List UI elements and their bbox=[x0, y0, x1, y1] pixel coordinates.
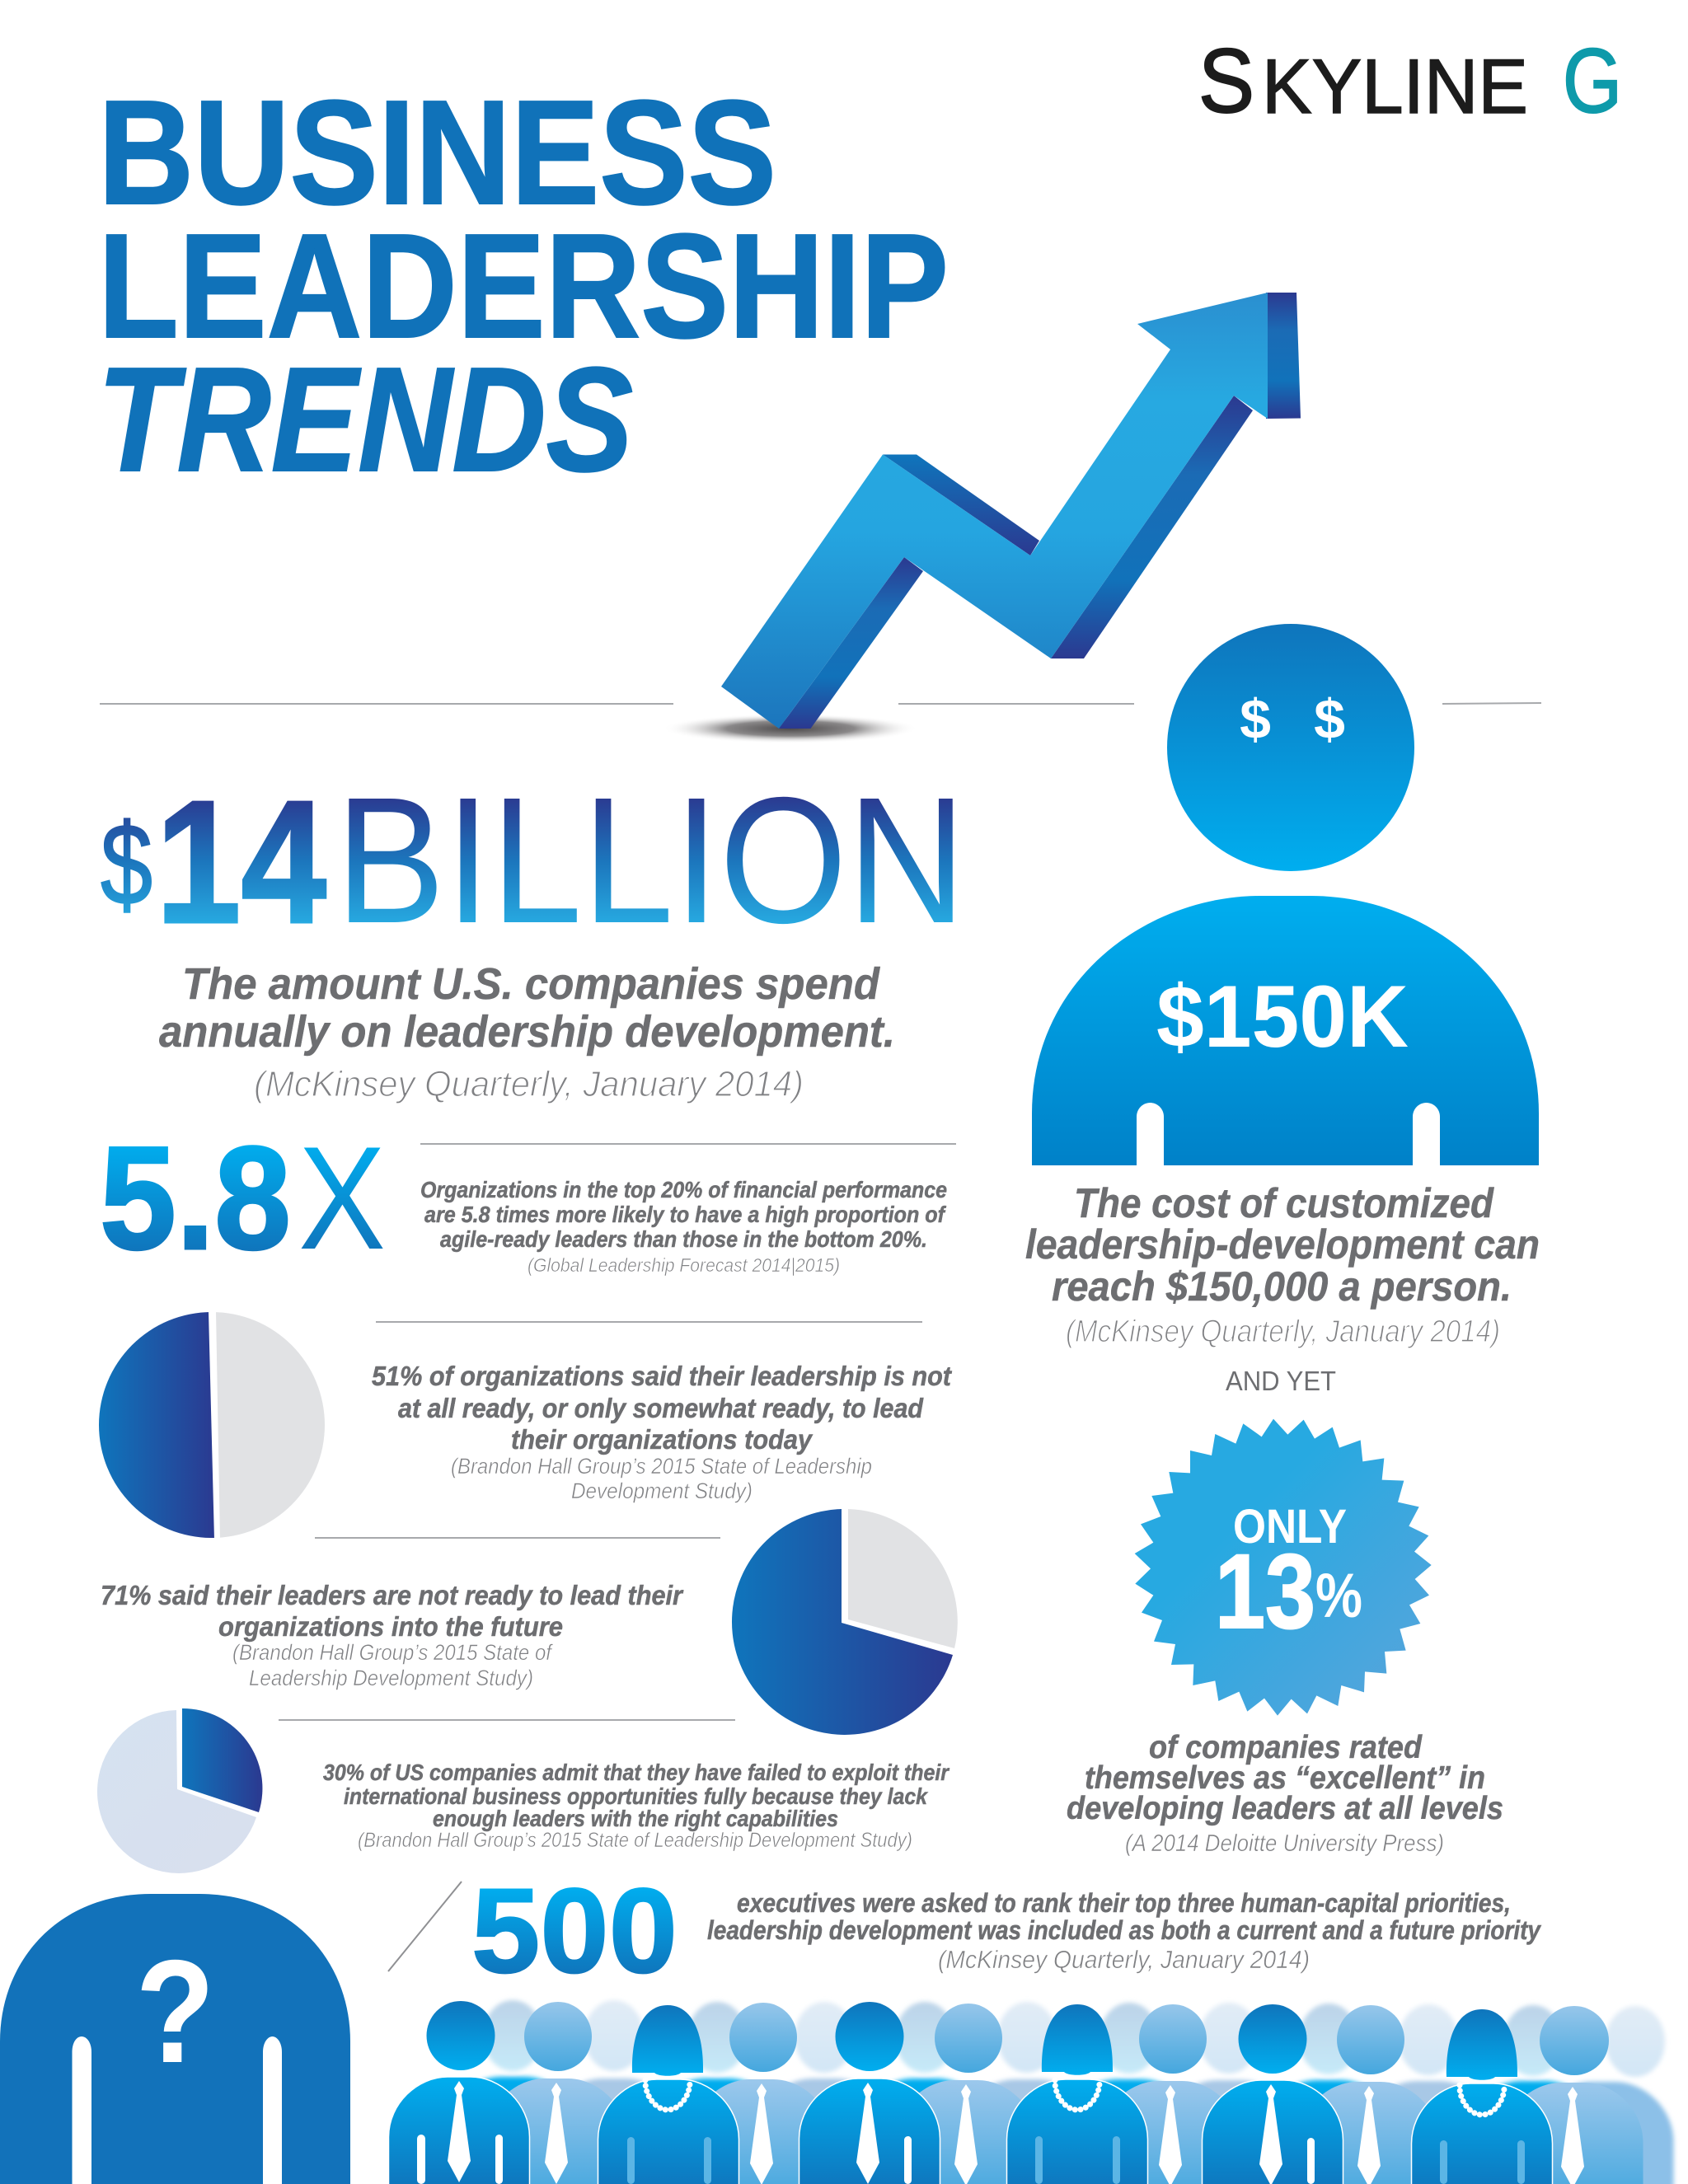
text: 30% description bbox=[323, 1760, 950, 1852]
text: $150K description bbox=[1025, 1180, 1540, 1349]
logo: Skyline G: S bbox=[1198, 30, 1254, 132]
text: 71% description bbox=[101, 1580, 684, 1690]
text: $150K description: reach $150,000 a person. bbox=[1052, 1263, 1512, 1310]
middle row of light figures bbox=[486, 2002, 1643, 2184]
text: 500 description: leadership development was included as both a current and a future priority bbox=[707, 1915, 1542, 1945]
text: 500 description: executives were asked to rank their top three human-capital priorities, bbox=[737, 1888, 1511, 1918]
text: 71% description: (Brandon Hall Group’s 2015 State of bbox=[232, 1640, 553, 1665]
text: 51% description bbox=[372, 1361, 953, 1503]
icon: person with dollar eyes bbox=[1032, 624, 1539, 1165]
back row of blurred figures bbox=[442, 2000, 1673, 2184]
text: $150K description: (McKinsey Quarterly, January 2014) bbox=[1066, 1315, 1500, 1349]
front row of figures bbox=[389, 2001, 1553, 2184]
title: BUSINESS bbox=[98, 70, 776, 236]
text: 51% description: their organizations today bbox=[511, 1424, 814, 1455]
text: 13% description bbox=[1067, 1730, 1503, 1857]
icon: starburst badge only 13%: 13 bbox=[1215, 1533, 1315, 1651]
text: $14 billion description bbox=[159, 959, 895, 1104]
text: 5.8X description: are 5.8 times more likely to have a high proportion of bbox=[424, 1202, 946, 1227]
text: 51% description: Development Study) bbox=[571, 1479, 753, 1503]
stat: $14 billion: BILLION bbox=[335, 761, 966, 961]
stat: $14 billion: $ bbox=[101, 799, 152, 929]
divider above 71% text bbox=[315, 1537, 720, 1539]
logo: Skyline G: KYLINE bbox=[1262, 43, 1528, 129]
divider above 30% text bbox=[279, 1719, 735, 1721]
text: $150K description: The cost of customized bbox=[1074, 1180, 1494, 1226]
text: $14 billion description: annually on leadership development. bbox=[159, 1007, 895, 1057]
text: 13% description: of companies rated bbox=[1149, 1730, 1423, 1765]
text: 5.8X description: (Global Leadership Forecast 2014|2015) bbox=[528, 1254, 840, 1276]
text: 13% description: developing leaders at all levels bbox=[1067, 1791, 1503, 1826]
icon: question-mark person bbox=[0, 1894, 350, 2184]
icon: person with dollar eyes: $150K bbox=[1156, 967, 1409, 1066]
text: 71% description: Leadership Development Study) bbox=[249, 1666, 533, 1690]
text: 5.8X description bbox=[420, 1177, 947, 1276]
text: 5.8X description: Organizations in the top 20% of financial performance bbox=[420, 1177, 947, 1202]
icon: person with dollar eyes: $ bbox=[1314, 688, 1345, 751]
text: 51% description: (Brandon Hall Group’s 2015 State of Leadership bbox=[451, 1454, 872, 1479]
text: $150K description: leadership-development can bbox=[1025, 1221, 1540, 1268]
icon: question-mark person: ? bbox=[135, 1929, 214, 2093]
title: TRENDS bbox=[97, 337, 633, 503]
chart: 71% pie bbox=[732, 1509, 958, 1735]
text: 51% description: at all ready, or only somewhat ready, to lead bbox=[398, 1393, 924, 1423]
illustration: crowd of executives bbox=[389, 2000, 1673, 2184]
stat: 5.8X: X bbox=[298, 1116, 386, 1280]
text: and yet: AND YET bbox=[1226, 1366, 1336, 1396]
icon: starburst badge only 13%: ONLY bbox=[1233, 1500, 1347, 1554]
icon: person with dollar eyes: $ bbox=[1240, 688, 1271, 751]
stat: $14 billion: 14 bbox=[156, 764, 326, 959]
icon: rising arrow bbox=[663, 293, 1301, 743]
stat: 500: 500 bbox=[471, 1863, 678, 1998]
text: 500 description: (McKinsey Quarterly, January 2014) bbox=[938, 1945, 1310, 1974]
text: 71% description: 71% said their leaders are not ready to lead their bbox=[101, 1580, 684, 1610]
text: 13% description: themselves as “excellent” in bbox=[1085, 1760, 1485, 1796]
text: $14 billion description: The amount U.S. companies spend bbox=[182, 959, 880, 1009]
text: 30% description: (Brandon Hall Group’s 2015 State of Leadership Development Study) bbox=[358, 1829, 912, 1852]
text: 71% description: organizations into the future bbox=[218, 1611, 563, 1642]
text: 30% description: international business opportunities fully because they lack bbox=[344, 1783, 928, 1809]
text: $14 billion description: (McKinsey Quarterly, January 2014) bbox=[254, 1064, 804, 1104]
title: LEADERSHIP bbox=[98, 204, 949, 369]
chart: 30% pie bbox=[97, 1708, 262, 1873]
icon: starburst badge only 13% bbox=[1135, 1419, 1432, 1716]
stat: 5.8X: 5.8 bbox=[100, 1116, 291, 1280]
text: 13% description: (A 2014 Deloitte University Press) bbox=[1125, 1830, 1444, 1857]
chart: 51% pie bbox=[99, 1312, 325, 1538]
divider above 51% text bbox=[376, 1321, 922, 1323]
stat: $14 billion bbox=[101, 761, 966, 961]
title bbox=[97, 70, 949, 503]
slash divider bbox=[388, 1882, 462, 1971]
logo: Skyline G bbox=[1198, 30, 1622, 132]
text: 5.8X description: agile-ready leaders than those in the bottom 20%. bbox=[440, 1226, 927, 1252]
divider lines bbox=[100, 703, 1541, 704]
divider above 5.8X text bbox=[420, 1143, 956, 1145]
text: 51% description: 51% of organizations said their leadership is not bbox=[372, 1361, 953, 1391]
text: 500 description bbox=[707, 1888, 1542, 1974]
icon: starburst badge only 13%: % bbox=[1315, 1561, 1362, 1631]
text: 30% description: enough leaders with the right capabilities bbox=[433, 1806, 838, 1831]
logo: Skyline G: G bbox=[1563, 30, 1622, 132]
text: 30% description: 30% of US companies admit that they have failed to exploit their bbox=[323, 1760, 950, 1785]
